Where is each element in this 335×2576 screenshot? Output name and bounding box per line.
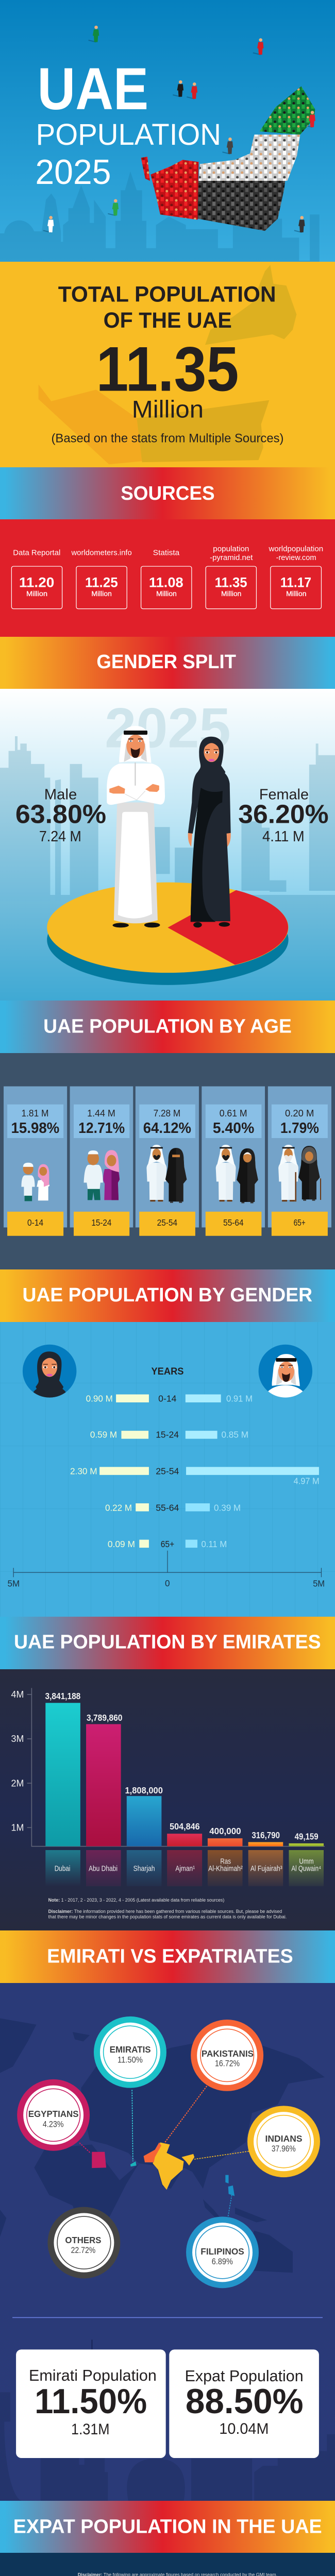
note and disclaimer: Disclaimer: The information provided here has been gathered from various reliable sources. But, please be advised [48, 1909, 282, 1914]
female stat: Female [259, 787, 309, 803]
age labels: 0-14 [158, 1394, 176, 1403]
male values: 0.11 M [201, 1539, 227, 1549]
heading: gender split: GENDER SPLIT [96, 651, 236, 673]
card: emirati population: 11.50% [35, 2383, 147, 2421]
heading: TOTAL POPULATION [58, 282, 276, 307]
source values: 11.25 [85, 574, 118, 590]
bubble: filipinos [186, 2216, 259, 2288]
emirate name tags: Ras [220, 1858, 231, 1866]
bar values [45, 1691, 319, 1842]
heading [58, 282, 276, 333]
scale axis: 5M [313, 1579, 325, 1589]
heading: population by age: UAE POPULATION BY AGE [43, 1015, 292, 1037]
source value boxes [11, 566, 321, 609]
female stat [238, 787, 329, 845]
source values: Million [91, 589, 112, 598]
crowd shaped like the UAE map [141, 86, 315, 231]
age labels: 25-54 [156, 1466, 179, 1477]
bar chart axes: 4M [11, 1689, 24, 1700]
male values: 4.97 M [294, 1476, 320, 1486]
basis note: (Based on the stats from Multiple Sources) [51, 432, 284, 445]
heading: sources: SOURCES [121, 482, 215, 504]
source labels: population [213, 545, 249, 553]
note and disclaimer [48, 1897, 287, 1919]
card: 65+ [268, 1087, 331, 1236]
heading: expat population [0, 2501, 335, 2553]
source values: Million [221, 589, 241, 598]
heading: population by emirates: UAE POPULATION BY EMIRATES [14, 1631, 321, 1653]
bubble: indians: 37.96% [272, 2144, 296, 2154]
bar values: 49,159 [295, 1832, 319, 1842]
bubble: others [47, 2207, 120, 2278]
card: expat population: 10.04M [219, 2420, 269, 2437]
female values: 0.22 M [105, 1503, 132, 1513]
card: 0-14: 1.81 M [21, 1108, 49, 1119]
card: 25-54: 25-54 [157, 1217, 177, 1228]
panel: sources [0, 519, 335, 637]
panel: emirati vs expatriates map [0, 1983, 335, 2501]
icon: seniors [278, 1145, 321, 1201]
heading: population by gender: UAE POPULATION BY GENDER [23, 1284, 312, 1306]
bubble: egyptians: 4.23% [43, 2120, 64, 2129]
source labels: Statista [153, 549, 180, 557]
bubble: pakistanis: 16.72% [215, 2059, 240, 2069]
male values [201, 1394, 320, 1549]
panel: hero [0, 0, 335, 262]
skyline silhouette [0, 172, 320, 262]
female stat: 4.11 M [262, 828, 305, 845]
bubble: emiratis: EMIRATIS [110, 2044, 151, 2055]
card: 25-54 [136, 1087, 199, 1236]
source labels: Data Reportal [13, 549, 60, 557]
bubble: others: 22.72% [71, 2246, 96, 2255]
heading: emirati vs expatriates [0, 1930, 335, 1983]
title: UAE [38, 56, 148, 122]
panel: expat population chart [0, 2553, 335, 2576]
emirate name tags: Al-Khaimah² [208, 1865, 243, 1873]
female stat: 36.20% [238, 799, 329, 828]
bubble: others: OTHERS [65, 2235, 101, 2245]
note and disclaimer: Note: 1 - 2017, 2 - 2023, 3 - 2022, 4 - 2005 (Latest available data from reliable sources) [48, 1897, 224, 1903]
female values: 2.30 M [70, 1466, 97, 1477]
icon: adults [146, 1145, 187, 1203]
pie base [47, 883, 289, 985]
panel: population by emirates [0, 1669, 335, 1930]
bubble: filipinos: 6.89% [212, 2257, 233, 2266]
card: expat population: Expat Population [185, 2367, 304, 2385]
male values: 0.91 M [226, 1394, 253, 1403]
bubble: pakistanis [191, 2020, 263, 2091]
panel: gender split [0, 689, 335, 1001]
heading: population by age [0, 1001, 335, 1053]
emirate name tags: Umm [299, 1858, 314, 1866]
card: 0-14 [4, 1087, 67, 1236]
note and disclaimer: that there may be minor changes in the population stats of some emirates as current data is only available for Dubai. [48, 1914, 287, 1919]
age labels: 65+ [161, 1539, 174, 1549]
male stat: 63.80% [15, 799, 106, 828]
male stat: Male [44, 787, 77, 803]
icon: teenagers [83, 1150, 120, 1200]
bar chart axes: 1M [11, 1823, 24, 1833]
scale axis: 5M [8, 1579, 20, 1589]
card: 55-64: 5.40% [213, 1120, 254, 1137]
card: expat population: 88.50% [186, 2383, 304, 2421]
source labels [13, 545, 323, 562]
bar chart axes: 2M [11, 1778, 24, 1789]
title: 2025 [35, 154, 111, 192]
card: 15-24: 1.44 M [87, 1108, 115, 1119]
card: 65+: 1.79% [280, 1120, 319, 1137]
2025 watermark: 2025 [105, 697, 231, 759]
bubble: egyptians: EGYPTIANS [28, 2109, 79, 2119]
card: 15-24: 15-24 [91, 1217, 112, 1228]
bubble: egyptians [17, 2079, 90, 2151]
male stat [15, 787, 106, 845]
title: POPULATION [36, 117, 221, 151]
heading: expat population: EXPAT POPULATION IN THE UAE [13, 2516, 322, 2538]
bar chart axes: 3M [11, 1734, 24, 1744]
source labels: worldpopulation [268, 545, 323, 553]
scale axis [8, 1551, 325, 1589]
source values: 11.17 [280, 574, 311, 590]
source labels: worldometers.info [71, 549, 132, 557]
card: 0-14: 0-14 [27, 1217, 44, 1228]
axis title: YEARS [151, 1366, 184, 1377]
bubble: emiratis: 11.50% [118, 2055, 143, 2064]
card: 25-54: 64.12% [143, 1120, 191, 1137]
panel: total population [0, 262, 335, 467]
card: 55-64 [202, 1087, 265, 1236]
bubble: pakistanis: PAKISTANIS [202, 2048, 254, 2059]
icon: woman avatar [23, 1345, 76, 1398]
panel: population by gender [0, 1322, 335, 1617]
source labels: -pyramid.net [210, 554, 253, 562]
emirate name tags [45, 1850, 324, 1886]
bar values: 504,846 [170, 1821, 200, 1832]
card: 55-64: 55-64 [223, 1217, 244, 1228]
emirate name tags: Al Quwain⁴ [291, 1865, 321, 1873]
card: emirati population: 1.31M [71, 2421, 110, 2438]
age labels: 15-24 [156, 1430, 179, 1440]
emirate name tags: Ajman¹ [175, 1865, 195, 1873]
card: 65+: 0.20 M [285, 1108, 314, 1119]
age labels: 55-64 [156, 1503, 179, 1513]
woman figure [188, 737, 231, 927]
scattered people [43, 26, 305, 232]
emirate name tags: Sharjah [133, 1865, 155, 1873]
source values [19, 574, 311, 598]
female values: 0.90 M [86, 1394, 113, 1403]
source values: 11.08 [149, 574, 183, 590]
bubble: indians [247, 2106, 320, 2177]
icon: children [21, 1163, 49, 1201]
heading: sources [0, 467, 335, 519]
bubble: filipinos: FILIPINOS [200, 2246, 244, 2257]
big number: 11.35 [96, 334, 239, 404]
heading: population by emirates [0, 1617, 335, 1669]
city skyline [0, 736, 335, 901]
emirate name tags: Abu Dhabi [89, 1865, 118, 1873]
emirate name tags: Dubai [55, 1865, 70, 1873]
heading: gender split [0, 637, 335, 689]
butterfly bars [99, 1395, 319, 1548]
heading: emirati vs expatriates: EMIRATI VS EXPATRIATES [47, 1945, 293, 1967]
card: 0-14: 15.98% [11, 1120, 59, 1137]
heading: OF THE UAE [104, 308, 232, 333]
source labels: -review.com [276, 554, 316, 562]
bar values: 3,841,188 [45, 1691, 80, 1701]
card: 15-24 [70, 1087, 133, 1236]
highlighted countries [92, 2142, 234, 2196]
card: emirati population [16, 2349, 166, 2458]
male values: 0.39 M [214, 1503, 241, 1513]
icon: man avatar [259, 1345, 312, 1398]
card: 65+: 65+ [294, 1217, 306, 1228]
heading: population by gender [0, 1269, 335, 1322]
bar values: 316,790 [252, 1830, 280, 1840]
age labels [156, 1394, 179, 1549]
bubble: emiratis [94, 2016, 166, 2088]
map watermark [205, 265, 296, 345]
scale axis: 0 [165, 1578, 170, 1588]
female values [70, 1394, 135, 1549]
card: expat population [169, 2349, 319, 2458]
male stat: 7.24 M [39, 828, 81, 845]
emirate name tags: Al Fujairah³ [250, 1865, 282, 1873]
city skyline [0, 2392, 335, 2501]
emirate bars [45, 1703, 324, 1846]
man figure [107, 726, 165, 927]
bar values: 3,789,860 [87, 1713, 123, 1723]
source values: 11.35 [215, 574, 247, 590]
female values: 0.59 M [90, 1430, 117, 1440]
bar values: 1,808,000 [125, 1785, 163, 1795]
source values: Million [26, 589, 47, 598]
unit: Million [132, 396, 204, 423]
source values: Million [156, 589, 177, 598]
source values: 11.20 [19, 574, 54, 590]
bar chart axes [11, 1688, 325, 1846]
world map [0, 2019, 325, 2273]
male values: 0.85 M [221, 1430, 248, 1440]
bar values: 400,000 [209, 1826, 241, 1836]
card: 55-64: 0.61 M [220, 1108, 247, 1119]
card: emirati population: Emirati Population [29, 2367, 157, 2384]
panel: population by age [0, 1053, 335, 1270]
card: 15-24: 12.71% [78, 1120, 125, 1137]
icon: older adults [216, 1145, 258, 1204]
source values: Million [286, 589, 306, 598]
bubble: indians: INDIANS [265, 2133, 303, 2144]
card: 25-54: 7.28 M [154, 1108, 180, 1119]
dashed connectors [79, 2086, 249, 2217]
female values: 0.09 M [108, 1539, 135, 1549]
title [35, 56, 221, 192]
